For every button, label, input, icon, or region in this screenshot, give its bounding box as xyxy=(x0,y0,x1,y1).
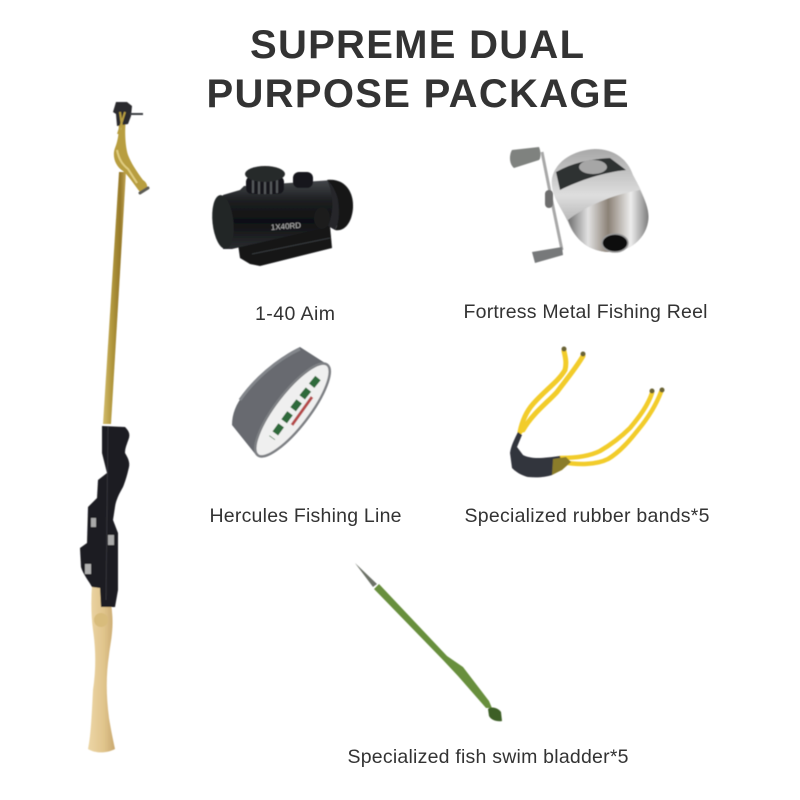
wound line xyxy=(232,347,325,455)
band tips xyxy=(562,346,664,394)
label print xyxy=(272,378,318,438)
reel body xyxy=(552,149,648,252)
fishing slingshot rod xyxy=(80,102,148,752)
title: SUPREME DUAL xyxy=(250,23,584,67)
rubber bands xyxy=(510,346,664,477)
windage knob xyxy=(314,207,330,229)
elevation turret xyxy=(245,166,285,194)
sight body xyxy=(223,180,345,249)
stock emblem xyxy=(94,613,108,627)
rod shaft xyxy=(103,172,126,424)
title xyxy=(206,23,628,116)
side turret xyxy=(293,172,313,188)
front lens cap xyxy=(210,194,236,250)
model marking: 1X40RD xyxy=(271,221,302,232)
green shaft xyxy=(374,584,492,708)
labels: 1-40 Aim xyxy=(255,303,335,325)
spincast fishing reel xyxy=(510,147,649,263)
labels: Specialized fish swim bladder*5 xyxy=(348,746,629,768)
right band xyxy=(560,392,661,464)
silver window xyxy=(579,160,607,174)
labels: Specialized rubber bands*5 xyxy=(464,505,710,527)
red dot sight xyxy=(210,166,353,266)
rear ring xyxy=(327,180,353,230)
line opening xyxy=(602,234,628,252)
labels xyxy=(210,301,710,768)
reel nose cone xyxy=(568,190,649,252)
black grip xyxy=(80,426,129,607)
reel handle xyxy=(510,147,563,263)
rubber band fork xyxy=(114,113,148,193)
left band xyxy=(520,351,583,432)
dart tip xyxy=(355,563,377,587)
wooden stock xyxy=(88,585,115,752)
title: PURPOSE PACKAGE xyxy=(206,72,628,116)
dart tail xyxy=(488,708,502,721)
fishing line spool xyxy=(232,347,341,466)
labels: Hercules Fishing Line xyxy=(210,505,402,527)
fish swim bladder dart xyxy=(355,563,502,721)
black band xyxy=(556,158,626,190)
spool label xyxy=(244,354,341,466)
labels: Fortress Metal Fishing Reel xyxy=(464,301,708,323)
leather pouch xyxy=(510,432,562,477)
rod tip clamp xyxy=(113,102,143,134)
rail mount xyxy=(238,226,332,266)
